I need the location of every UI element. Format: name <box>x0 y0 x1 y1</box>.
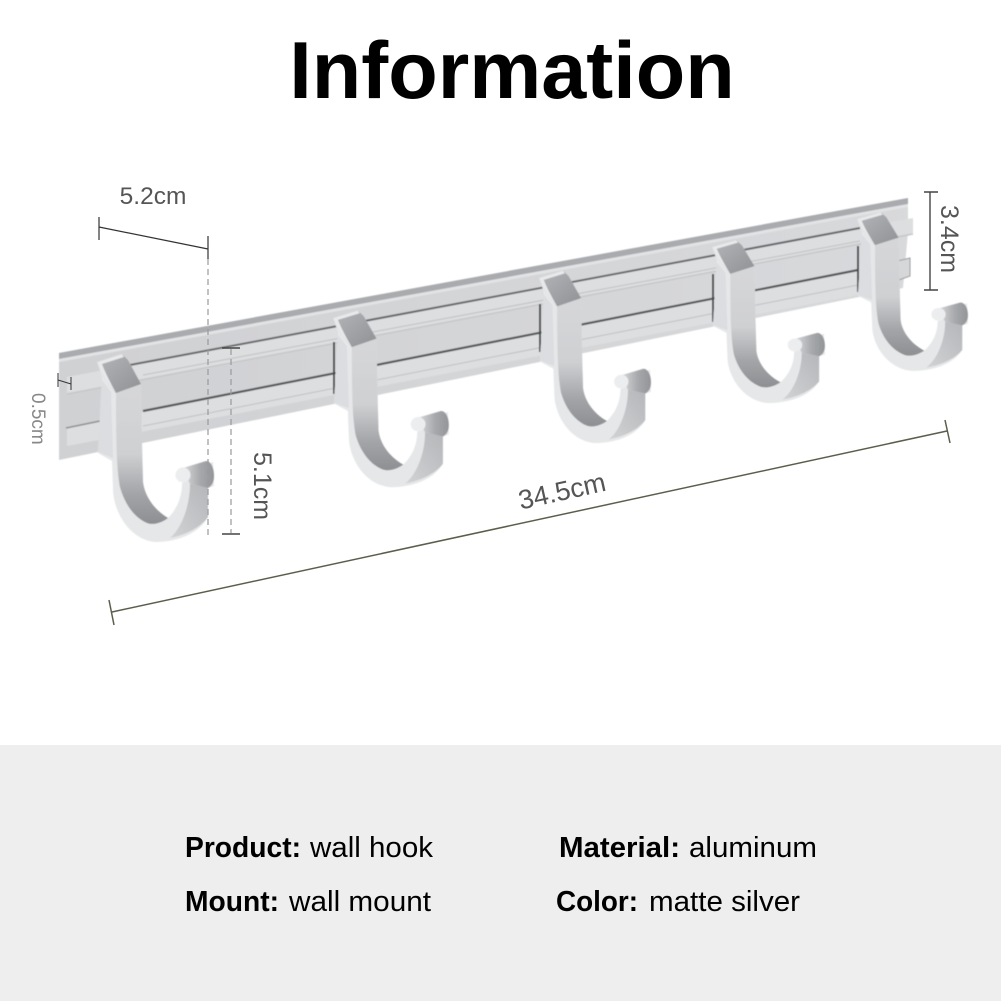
hook 3 <box>539 271 651 443</box>
product illustration: aluminium wall hook rack <box>59 198 968 542</box>
dimension: 3.4cm plate height <box>924 192 963 290</box>
dimension: 5.2cm depth <box>99 183 208 536</box>
spec: mount <box>185 886 431 918</box>
lower rail <box>66 270 858 446</box>
hook 1 <box>97 354 214 542</box>
spec: mount: Mount: <box>185 886 279 918</box>
dimension: 0.5cm rail thickness: 0.5cm <box>27 393 48 445</box>
spec: material: aluminum <box>689 832 817 864</box>
upper rail <box>67 218 913 394</box>
right rail stub <box>893 258 910 282</box>
spec: color: matte silver <box>649 886 800 918</box>
rail slot shadows <box>334 246 858 394</box>
spec: product: wall hook <box>309 832 434 864</box>
dimension: 5.2cm depth: 5.2cm <box>120 183 186 210</box>
hook 4 <box>712 240 825 403</box>
spec: product: Product: <box>185 832 301 864</box>
hook 5 <box>857 212 968 371</box>
dimension: 34.5cm total length: 34.5cm <box>516 467 609 515</box>
spec: material: Material: <box>559 832 680 864</box>
spec: color: Color: <box>556 886 638 918</box>
dimension: 3.4cm plate height: 3.4cm <box>935 205 963 273</box>
dimension: 0.5cm rail thickness <box>27 373 71 445</box>
title: Information <box>289 26 735 116</box>
spec: mount: wall mount <box>288 886 431 918</box>
dimension: 34.5cm total length <box>109 420 950 625</box>
dimension: 5.1cm hook height <box>222 348 276 534</box>
dimension: 5.1cm hook height: 5.1cm <box>248 452 276 520</box>
spec: color <box>556 886 800 918</box>
specification panel <box>0 745 1001 1001</box>
spec: product <box>185 832 434 864</box>
hook 2 <box>333 310 449 487</box>
backplate <box>59 198 908 460</box>
spec: material <box>559 832 817 864</box>
